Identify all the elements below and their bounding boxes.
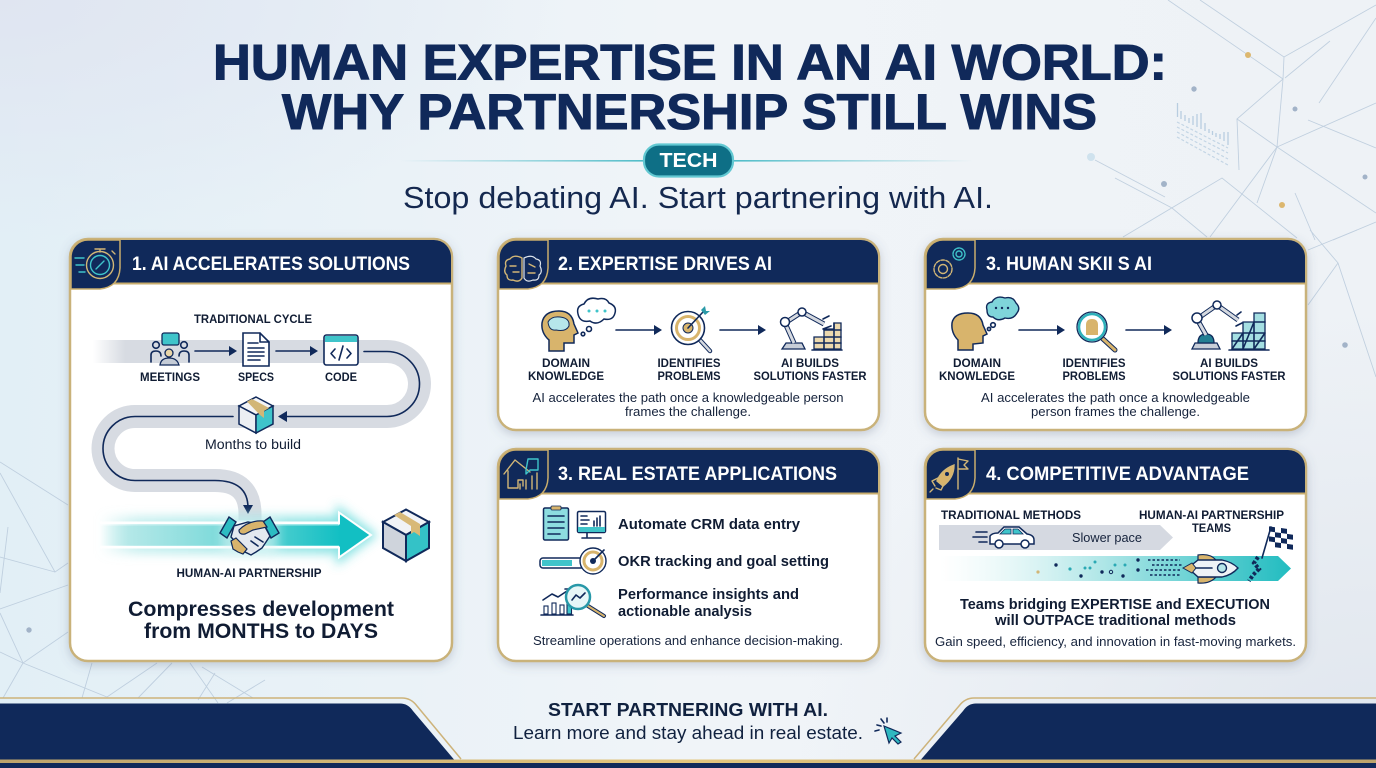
description <box>981 391 1250 419</box>
icon: magnifier <box>1077 312 1115 350</box>
callout: compresses development: from MONTHS to DAYS <box>144 620 378 643</box>
panel header 4 <box>499 450 878 499</box>
callout: compresses development <box>128 598 394 643</box>
label: months to build: Months to build <box>205 437 301 452</box>
description: AI accelerates the path once a knowledgeable <box>981 391 1250 405</box>
icon: brain <box>505 256 541 281</box>
footer banner <box>0 698 1376 768</box>
panel header 2 <box>499 240 878 289</box>
icon: head with thought cloud <box>952 297 1019 350</box>
column labels: TRADITIONAL METHODS <box>941 508 1081 522</box>
panel: 2. expertise drives AI <box>498 239 879 430</box>
icon: gears <box>934 248 965 278</box>
step labels <box>528 356 867 383</box>
icon: specs document <box>243 333 269 366</box>
panel header 1 <box>71 240 451 289</box>
panel header 4: 3. REAL ESTATE APPLICATIONS <box>558 463 837 485</box>
panel header 3 <box>926 240 1305 289</box>
footer call to action <box>513 700 863 743</box>
footer right shape <box>914 698 1376 760</box>
panel header 3: 3. HUMAN SKII S AI <box>986 253 1152 275</box>
row: OKR tracking: OKR tracking and goal setting <box>618 554 829 570</box>
icon: box <box>239 397 273 433</box>
icon: code window <box>324 335 358 365</box>
title: WHY PARTNERSHIP STILL WINS <box>282 84 1097 140</box>
tech badge <box>400 144 973 176</box>
step labels: CODE <box>325 370 357 384</box>
panel: 1. AI accelerates solutions <box>70 239 452 661</box>
panel header 2: 2. EXPERTISE DRIVES AI <box>558 253 772 275</box>
step labels: IDENTIFIES <box>1062 356 1126 370</box>
row: automate CRM: Automate CRM data entry <box>618 517 800 533</box>
step labels: AI BUILDS <box>1200 356 1258 370</box>
label: traditional cycle: TRADITIONAL CYCLE <box>194 312 312 326</box>
icon: goal target <box>580 548 606 574</box>
icon: monitor dashboard <box>578 512 606 538</box>
label: human-ai partnership: HUMAN-AI PARTNERSHIP <box>176 566 322 580</box>
panel header 1: 1. AI ACCELERATES SOLUTIONS <box>132 253 410 275</box>
step labels: IDENTIFIES <box>658 356 720 370</box>
description: Gain speed, efficiency, and innovation in fast-moving markets. <box>935 635 1296 649</box>
icon: clipboard <box>544 506 568 540</box>
footer call to action: Learn more and stay ahead in real estate. <box>513 723 863 743</box>
step labels: KNOWLEDGE <box>528 369 604 383</box>
description <box>532 391 844 419</box>
column labels: TEAMS <box>1192 521 1231 535</box>
grey arrow: slower pace: Slower pace <box>1072 531 1142 545</box>
description: frames the challenge. <box>625 405 751 419</box>
arrow: domain to problems <box>616 325 662 335</box>
panel header 5: 4. COMPETITIVE ADVANTAGE <box>986 463 1249 485</box>
icon: car <box>973 527 1034 548</box>
description: AI accelerates the path once a knowledgeable person <box>532 391 844 405</box>
step labels: SOLUTIONS FASTER <box>754 369 867 383</box>
step labels: SPECS <box>238 370 274 384</box>
step labels: DOMAIN <box>953 356 1001 370</box>
icon: house with chart <box>504 459 538 489</box>
winding process track <box>93 340 420 520</box>
arrow: problems to solutions <box>1126 325 1172 335</box>
row: performance insights: actionable analysis <box>618 604 752 620</box>
teal arrow: fast track <box>940 556 1291 581</box>
panel header 5 <box>926 450 1305 499</box>
description: Streamline operations and enhance decision-making. <box>533 634 843 648</box>
column labels: HUMAN-AI PARTNERSHIP <box>1139 508 1284 522</box>
icon: robot arm with building <box>1192 301 1269 350</box>
row: OKR tracking <box>540 548 829 574</box>
panel: 4. competitive advantage <box>925 449 1306 661</box>
icon: cursor click <box>875 718 901 744</box>
icon: rocket <box>1183 555 1238 583</box>
grey arrow: slower pace <box>939 525 1173 550</box>
panel: 3. real estate applications <box>498 449 879 661</box>
callout: outpace: Teams bridging EXPERTISE and EXECUTION <box>960 597 1270 613</box>
teal partnership arrow <box>100 504 378 566</box>
icon: delivered box <box>383 510 429 561</box>
row: performance insights: Performance insights and <box>618 587 799 603</box>
icon: rocket and flag <box>930 458 968 492</box>
icon: growth chart <box>541 589 573 615</box>
icon: stopwatch <box>75 249 115 278</box>
arrow: domain to problems <box>1019 325 1065 335</box>
step labels: KNOWLEDGE <box>939 369 1015 383</box>
step labels <box>140 370 357 384</box>
subtitle: Stop debating AI. Start partnering with AI. <box>403 180 993 215</box>
panel: 3. human skills AI <box>925 239 1306 430</box>
icon: meetings <box>151 333 189 365</box>
row: automate CRM <box>544 506 800 540</box>
column labels <box>941 508 1284 535</box>
arrow: meetings to specs <box>195 346 237 356</box>
icon: head with thought cloud <box>542 298 615 351</box>
icon: progress bar <box>540 558 584 568</box>
callout: outpace <box>960 597 1270 629</box>
footer left shape <box>0 698 461 760</box>
arrow: specs to code <box>276 346 318 356</box>
step labels: SOLUTIONS FASTER <box>1172 369 1286 383</box>
arrow: problems to solutions <box>720 325 766 335</box>
step labels: DOMAIN <box>542 356 590 370</box>
icon: robot arm with boxes <box>780 308 842 350</box>
callout: outpace: will OUTPACE traditional methods <box>994 613 1236 629</box>
title <box>213 34 1167 140</box>
tech badge: TECH <box>660 150 718 172</box>
row: performance insights <box>541 585 799 620</box>
icon: analysis magnifier <box>566 585 604 616</box>
icon: target magnifier <box>672 306 710 351</box>
step labels: PROBLEMS <box>1062 369 1126 383</box>
title: HUMAN EXPERTISE IN AN AI WORLD: <box>213 34 1167 90</box>
step labels: PROBLEMS <box>658 369 720 383</box>
footer call to action: START PARTNERING WITH AI. <box>548 700 828 720</box>
callout: compresses development: Compresses development <box>128 598 394 621</box>
icon: handshake <box>220 516 279 556</box>
step labels <box>939 356 1286 383</box>
description: person frames the challenge. <box>1031 405 1200 419</box>
icon: checkered finish flag <box>1249 526 1293 581</box>
step labels: AI BUILDS <box>781 356 839 370</box>
step labels: MEETINGS <box>140 370 200 384</box>
